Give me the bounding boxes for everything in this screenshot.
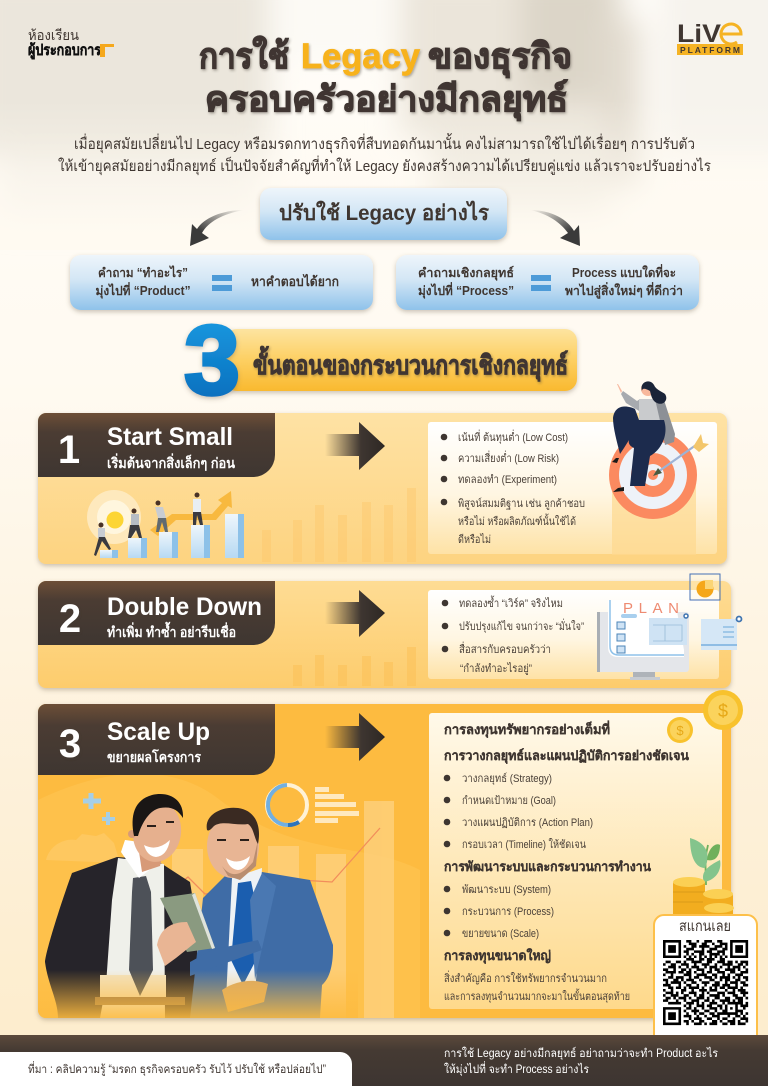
icon: coin stack and plant	[673, 838, 734, 920]
title: ของธุรกิจ	[428, 37, 572, 78]
icon: plan monitor	[597, 574, 742, 680]
icon: donut chart	[267, 785, 359, 825]
bullet list	[441, 429, 585, 546]
title: ครอบครัวอย่างมีกลยุทธ์	[205, 79, 568, 121]
content list: การพัฒนาระบบและกระบวนการทำงาน	[444, 859, 651, 874]
arrow	[325, 590, 385, 637]
photo: two businessmen	[38, 794, 358, 1018]
card: product question: มุ่งไปที่ “Product”	[96, 282, 190, 299]
QR code	[663, 941, 748, 1024]
header tab: Double Down	[107, 593, 262, 621]
bullet list: เน้นที่ ต้นทุนต่ำ (Low Cost)	[458, 429, 568, 444]
icon: gold coins top: $	[718, 701, 728, 721]
bullet list: ความเสี่ยงต่ำ (Low Risk)	[458, 450, 559, 465]
icon: plan monitor: PLAN	[623, 600, 679, 617]
logo: classroom for entrepreneurs: ห้องเรียน	[28, 27, 79, 43]
intro paragraph: เมื่อยุคสมัยเปลี่ยนไป Legacy หรือมรดกทางธุรกิจที่สืบทอดกันมานั้น คงไม่สามารถใช้ไปได้เรื่อยๆ การปรับตัว	[74, 133, 695, 154]
card: process question: มุ่งไปที่ “Process”	[418, 282, 514, 299]
title: Legacy	[301, 37, 421, 76]
header tab: 2	[59, 597, 81, 641]
source note: ที่มา : คลิปความรู้ “มรดก ธุรกิจครอบครัว รับไว้ ปรับใช้ หรือปล่อยไป”	[28, 1061, 326, 1076]
card: process question	[396, 255, 699, 310]
content list: วางกลยุทธ์ (Strategy)	[462, 772, 552, 785]
title	[199, 35, 572, 121]
card: process question: คำถามเชิงกลยุทธ์	[418, 265, 514, 281]
header tab	[38, 704, 275, 775]
card: process question: พาไปสู่สิ่งใหม่ๆ ที่ดีกว่า	[565, 282, 683, 299]
card: product question	[70, 255, 373, 310]
tablet and hand	[157, 893, 215, 966]
content list: การลงทุนขนาดใหญ่	[444, 947, 551, 964]
header tab	[38, 581, 275, 645]
QR code card	[654, 915, 757, 1035]
content list: ขยายขนาด (Scale)	[462, 928, 539, 940]
source note	[0, 1052, 352, 1086]
panel: step 2 double down	[38, 574, 742, 688]
logo: classroom for entrepreneurs: ผู้ประกอบการ	[28, 42, 102, 60]
intro paragraph: ให้เข้ายุคสมัยอย่างมีกลยุทธ์ เป็นปัจจัยสำคัญที่ทำให้ Legacy ยังคงสร้างความได้เปรียบคู่แข่ง แล้วเราจะปรับอย่างไร	[58, 155, 711, 176]
logo: classroom for entrepreneurs	[28, 27, 114, 60]
footer takeaway	[444, 1046, 718, 1076]
content list: พัฒนาระบบ (System)	[462, 884, 551, 896]
icon: gold coins top: $	[676, 723, 684, 738]
header tab: เริ่มต้นจากสิ่งเล็กๆ ก่อน	[107, 453, 235, 471]
bullet list: หรือไม่ หรือผลิตภัณฑ์นั้นใช้ได้	[458, 513, 576, 528]
bullet list	[442, 595, 584, 675]
bullet list: “กำลังทำอะไรอยู่”	[460, 662, 532, 675]
bullet list: ดีหรือไม่	[458, 533, 491, 546]
content list: กระบวนการ (Process)	[462, 906, 554, 918]
panel: step 1 start small	[38, 381, 727, 564]
bullet list: สื่อสารกับครอบครัวว่า	[459, 641, 551, 656]
logo: Live Platform: LiV	[677, 20, 721, 48]
title: การใช้	[199, 35, 289, 76]
callout: how to apply legacy	[260, 188, 507, 240]
text box	[429, 713, 722, 1009]
content list: กรอบเวลา (Timeline) ให้ชัดเจน	[462, 838, 586, 851]
header tab: Start Small	[107, 423, 233, 451]
header tab: Scale Up	[107, 718, 210, 746]
header tab: ขยายผลโครงการ	[107, 748, 201, 765]
left man	[45, 794, 197, 1018]
icon: woman on target	[609, 381, 709, 555]
banner: 3 steps: ขั้นตอนของกระบวนการเชิงกลยุทธ์	[253, 345, 568, 382]
bullet list: พิสูจน์สมมติฐาน เช่น ลูกค้าชอบ	[458, 497, 585, 510]
QR code card: สแกนเลย	[679, 918, 731, 935]
logo: Live Platform: PLATFORM	[680, 45, 740, 55]
logo: Live Platform	[677, 20, 743, 55]
text box	[428, 422, 717, 554]
content list: กำหนดเป้าหมาย (Goal)	[462, 795, 556, 807]
faded bars chart	[262, 488, 416, 562]
content list: วางแผนปฏิบัติการ (Action Plan)	[462, 817, 593, 829]
content list	[444, 720, 689, 1003]
icon: gold coins top	[667, 690, 743, 743]
bullet list: ทดลองซ้ำ “เวิร์ค” จริงไหม	[459, 595, 563, 610]
callout: how to apply legacy: ปรับใช้ Legacy อย่างไร	[279, 200, 490, 225]
bullet list: ทดลองทำ (Experiment)	[458, 474, 557, 486]
footer bar	[0, 1035, 768, 1086]
card: product question: คำถาม “ทำอะไร”	[98, 265, 188, 280]
right man	[190, 808, 333, 1018]
header tab	[38, 413, 275, 477]
header tab: ทำเพิ่ม ทำซ้ำ อย่ารีบเชื่อ	[107, 621, 236, 640]
content list: และการลงทุนจำนวนมากจะมาในขั้นตอนสุดท้าย	[444, 988, 630, 1003]
header tab: 1	[58, 428, 80, 472]
header tab: 3	[59, 722, 81, 766]
icon: growth steps team	[87, 490, 244, 558]
arrow	[325, 422, 385, 470]
banner: 3 steps: 3	[184, 305, 240, 415]
intro paragraph	[58, 133, 711, 176]
card: process question: Process แบบใดที่จะ	[572, 264, 676, 280]
footer takeaway: ให้มุ่งไปที่ จะทำ Process อย่างไร	[444, 1061, 589, 1076]
banner: 3 steps	[184, 305, 577, 415]
content list: สิ่งสำคัญคือ การใช้ทรัพยากรจำนวนมาก	[444, 970, 607, 985]
faded bars chart	[293, 647, 416, 686]
footer takeaway: การใช้ Legacy อย่างมีกลยุทธ์ อย่าถามว่าจะทำ Product อะไร	[444, 1046, 718, 1060]
arrow: curved right	[530, 210, 580, 246]
arrow: curved left	[190, 210, 244, 246]
panel: step 3 scale up	[38, 690, 743, 1018]
text box	[428, 590, 719, 679]
content list: การลงทุนทรัพยากรอย่างเต็มที่	[444, 720, 610, 738]
card: product question: หาคำตอบได้ยาก	[251, 273, 339, 289]
content list: การวางกลยุทธ์และแผนปฏิบัติการอย่างชัดเจน	[444, 748, 689, 764]
bullet list: ปรับปรุงแก้ไข จนกว่าจะ “มั่นใจ”	[459, 618, 584, 633]
background chart	[38, 774, 420, 1018]
arrow	[325, 713, 385, 761]
